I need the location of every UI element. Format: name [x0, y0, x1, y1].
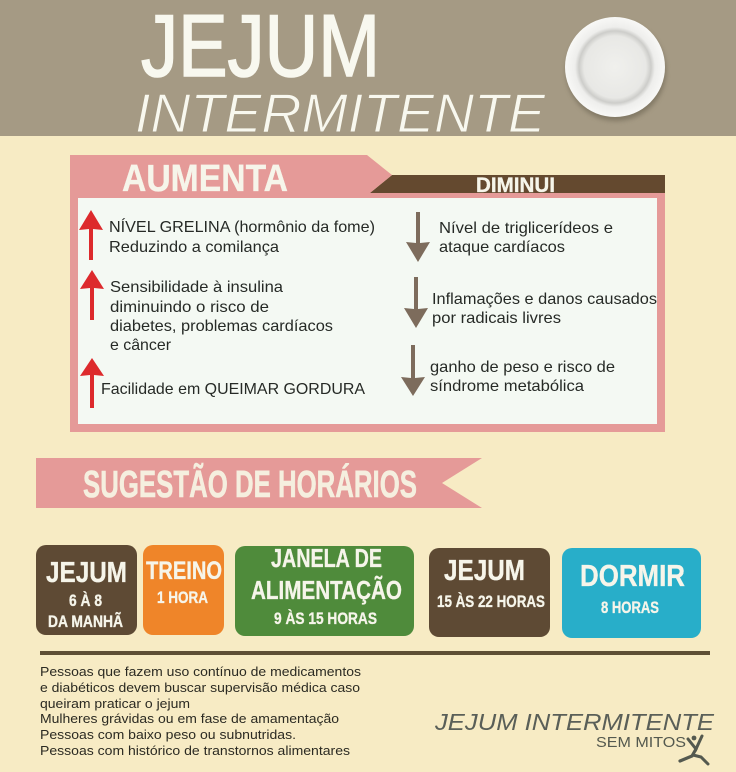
card: treino: TREINO	[146, 557, 222, 585]
icon: jumping figure	[680, 736, 708, 764]
title: INTERMITENTE: INTERMITENTE	[135, 82, 546, 144]
ribbon: diminui: DIMINUI	[476, 174, 555, 197]
icon: plate	[565, 17, 666, 121]
card: janela de alimentação: 9 ÀS 15 HORAS	[274, 609, 377, 628]
logo: jejum intermitente sem mitos: JEJUM INTERMITENTE	[434, 709, 715, 735]
item: insulina: diminuindo o risco de	[110, 299, 269, 316]
item: insulina: diabetes, problemas cardíacos	[110, 318, 333, 335]
icon: brown down arrow 3	[401, 345, 425, 396]
icon: red up arrow 2	[80, 270, 104, 320]
panel frame	[70, 190, 665, 432]
card: dormir: 8 HORAS	[601, 598, 659, 617]
card: jejum manhã	[36, 545, 137, 635]
ribbon: aumenta: AUMENTA	[122, 158, 288, 200]
header band	[0, 0, 736, 144]
icon: brown down arrow 2	[404, 277, 428, 328]
item: ganho de peso: ganho de peso e risco de	[430, 359, 615, 376]
footer note: Pessoas que fazem uso contínuo de medicamentos	[40, 664, 362, 679]
icon: brown down arrow 1	[406, 212, 430, 262]
item: triglicerídeos: ataque cardíacos	[439, 239, 565, 256]
item: ganho de peso	[430, 359, 615, 395]
item: inflamações: por radicais livres	[432, 310, 561, 327]
item: grelina: Reduzindo a comilança	[109, 239, 279, 256]
card: janela de alimentação	[235, 543, 414, 636]
item: inflamações	[432, 291, 657, 327]
item: insulina	[110, 279, 333, 354]
banner: sugestão de horários	[36, 458, 482, 508]
ribbon: diminui	[370, 174, 665, 197]
icon: red up arrow 1	[79, 210, 103, 260]
footer note: Pessoas com baixo peso ou subnutridas.	[40, 727, 296, 742]
item: grelina: NÍVEL GRELINA (hormônio da fome)	[109, 217, 375, 236]
card: jejum tarde: JEJUM	[444, 555, 525, 587]
card: dormir: DORMIR	[580, 558, 685, 593]
item: inflamações: Inflamações e danos causados	[432, 291, 657, 308]
footer note	[40, 664, 362, 758]
panel: aumenta / diminui	[70, 155, 665, 432]
item: triglicerídeos	[439, 220, 613, 256]
card: jejum manhã: DA MANHÃ	[48, 611, 123, 631]
item: grelina	[109, 217, 375, 256]
card: jejum tarde	[429, 548, 550, 637]
card: jejum manhã: JEJUM	[46, 557, 127, 589]
logo: jejum intermitente sem mitos	[434, 709, 715, 764]
item: insulina: e câncer	[110, 337, 172, 354]
item: ganho de peso: síndrome metabólica	[430, 378, 584, 395]
card: treino	[143, 545, 224, 635]
panel inner area	[78, 198, 657, 424]
card: jejum manhã: 6 À 8	[69, 591, 102, 610]
ribbon: aumenta	[70, 155, 392, 200]
footer note: queiram praticar o jejum	[40, 696, 190, 711]
card: janela de alimentação: JANELA DE	[271, 543, 382, 573]
footer note: Pessoas com histórico de transtornos alimentares	[40, 743, 351, 758]
item: queimar gordura: Facilidade em QUEIMAR GORDURA	[101, 381, 365, 398]
banner: sugestão de horários: SUGESTÃO DE HORÁRIOS	[83, 462, 417, 506]
card: dormir	[562, 548, 701, 638]
item: insulina: Sensibilidade à insulina	[110, 279, 283, 296]
card: treino: 1 HORA	[157, 588, 208, 607]
footer note: e diabéticos devem buscar supervisão médica caso	[40, 680, 360, 695]
logo: jejum intermitente sem mitos: SEM MITOS	[596, 734, 686, 751]
item: triglicerídeos: Nível de triglicerídeos e	[439, 220, 613, 237]
card: jejum tarde: 15 ÀS 22 HORAS	[437, 592, 545, 611]
card: janela de alimentação: ALIMENTAÇÃO	[251, 575, 402, 605]
icon: red up arrow 3	[80, 358, 104, 408]
footer note: Mulheres grávidas ou em fase de amamentação	[40, 711, 339, 726]
